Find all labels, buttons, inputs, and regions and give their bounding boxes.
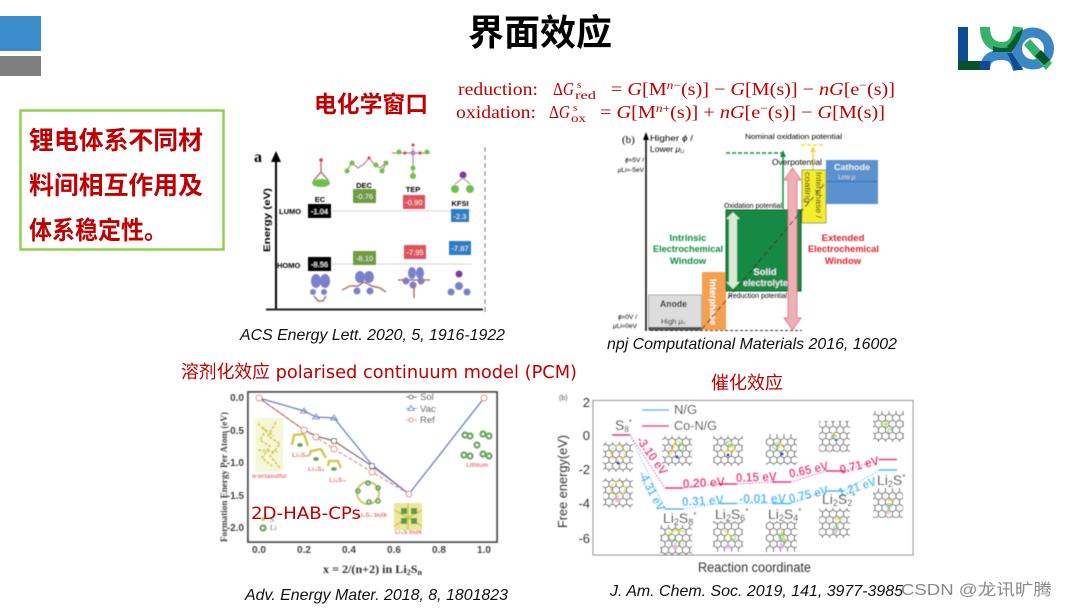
chart b: electrochemical window diagram: Extended: [822, 233, 865, 244]
watermark: CSDN @龙讯旷腾: [901, 581, 1052, 599]
interphase coating block: [802, 170, 826, 223]
chart d: free energy profile: Li: [877, 472, 888, 488]
chart b: electrochemical window diagram: Li: [680, 149, 684, 155]
chart b: electrochemical window diagram: (b): [622, 134, 635, 146]
chart b: electrochemical window diagram: μLi=0eV: [612, 323, 638, 330]
chart c: formation energy: Formation Energy Per Atom (eV): [219, 412, 229, 542]
chart a: LUMO and HOMO energy levels: -1.04: [311, 207, 328, 216]
chart a: LUMO and HOMO energy levels: -8.56: [311, 260, 328, 269]
structure insets: Li: [270, 523, 277, 532]
chart b: electrochemical window diagram: [612, 132, 879, 331]
chart b: electrochemical window diagram: Window: [825, 256, 862, 267]
chart d: free energy profile: 4: [793, 513, 798, 523]
chart c: formation energy: 0.0: [252, 545, 266, 556]
equations: reduction and oxidation: (s)]: [867, 79, 895, 100]
chart c: formation energy: [219, 392, 497, 577]
chart d: free energy profile: Li: [822, 491, 833, 507]
chart d: free energy profile: Co-N/G: [674, 418, 717, 433]
equations: reduction and oxidation: ΔG: [553, 79, 574, 99]
chart c: formation energy: -2.0: [227, 523, 244, 534]
chart d: free energy profile: -4: [578, 496, 590, 511]
chart d: free energy profile: 0.65 eV: [788, 459, 830, 481]
chart d: free energy profile: S: [679, 510, 688, 526]
chart d: free energy profile: 0.31 eV: [681, 493, 725, 509]
chart b: electrochemical window diagram: Reduction potential: [728, 293, 787, 300]
chart a: LUMO and HOMO energy levels: a: [254, 149, 262, 166]
window labels: Intrinsic: [670, 233, 706, 244]
annotation: 2D-HAB-CPs: 2D-HAB-CPs: [251, 504, 361, 524]
legend: [406, 392, 436, 426]
chart c: formation energy: 0.6: [387, 545, 401, 556]
icon: HOMO orbitals and molecules: [310, 267, 470, 301]
chart d: free energy profile: 0: [583, 428, 590, 443]
chart c: formation energy: 0.2: [297, 545, 311, 556]
chart a: LUMO and HOMO energy levels: -0.90: [405, 198, 423, 207]
chart d: free energy profile: S: [893, 472, 902, 488]
citation: Adv. Energy Mater.: Adv. Energy Mater. 2018, 8, 1801823: [244, 587, 508, 604]
equations: reduction and oxidation: s: [573, 102, 577, 114]
solid electrolyte block: [726, 210, 801, 291]
citation: J. Am. Chem. Soc.: J. Am. Chem. Soc. 2019, 141, 3977-3985: [609, 583, 903, 600]
equations: reduction and oxidation: = G[M: [611, 79, 664, 99]
chart a: LUMO and HOMO energy levels: HOMO: [277, 261, 300, 270]
chart a: LUMO and HOMO energy levels: TEP: [406, 185, 420, 194]
chart b: electrochemical window diagram: Nominal oxidation potential: [745, 132, 842, 141]
chart d: free energy profile: *: [745, 507, 748, 516]
legend: [642, 409, 669, 411]
chart d: free energy profile: 2: [779, 513, 784, 523]
chart c: formation energy: 1.0: [477, 545, 491, 556]
chart d: free energy profile: 2: [583, 395, 590, 410]
anode block: [648, 295, 702, 330]
chart d: free energy profile: *: [902, 473, 905, 482]
chart c: formation energy: 0.8: [432, 545, 446, 556]
chart b: electrochemical window diagram: Anode: [660, 299, 687, 309]
heading: electrochemical window: 电化学窗口: [314, 91, 428, 117]
chart d: free energy profile: -4.31 eV: [635, 469, 668, 514]
chart a: LUMO and HOMO energy levels: EC: [315, 195, 326, 204]
interphase orange block: [702, 272, 726, 330]
chart b: electrochemical window diagram: Oxidation potential: [724, 203, 782, 210]
heading: catalytic effect: 催化效应: [711, 373, 783, 393]
legend: Vac: [420, 404, 436, 415]
chart a: LUMO and HOMO energy levels: -2.3: [454, 212, 466, 221]
chart a: LUMO and HOMO energy levels: Energy (eV): [262, 188, 272, 252]
chart b: electrochemical window diagram: Electrochemical: [808, 244, 879, 255]
chart b: electrochemical window diagram: Electrochemical: [653, 244, 723, 255]
chart b: electrochemical window diagram: μLi=-5eV: [617, 167, 645, 174]
chart d: free energy profile: *: [798, 507, 801, 516]
chart c: formation energy: -0.5: [227, 426, 244, 437]
chart c: formation energy: -1.0: [227, 458, 244, 469]
decorative corner blocks: [0, 16, 41, 76]
chart a: LUMO and HOMO energy levels: LUMO: [279, 207, 301, 216]
structure insets: α-octasulfur: [252, 473, 287, 480]
structure insets: Li₂S₄: [329, 477, 346, 484]
chart d: free energy profile: S: [838, 491, 847, 507]
chart a: LUMO and HOMO energy levels: KFSI: [451, 199, 469, 208]
chart d: free energy profile: 0.71 eV: [838, 454, 881, 477]
chart d: free energy profile: -2: [578, 462, 590, 477]
callout: summary: 体系稳定性。: [29, 217, 167, 245]
chart b: electrochemical window diagram: Window: [670, 256, 707, 267]
chart d: free energy profile: 2: [847, 498, 852, 508]
chart c: formation energy: x = 2/(n+2) in Li: [323, 562, 406, 576]
chart a: LUMO and HOMO energy levels: -7.95: [406, 248, 424, 257]
chart b: electrochemical window diagram: High μLi: [661, 317, 686, 326]
equations: reduction and oxidation: nG[e: [720, 102, 759, 122]
cathode block: [826, 160, 878, 204]
chart d: free energy profile: Li: [768, 506, 779, 522]
callout: summary: 料间相互作用及: [29, 172, 203, 200]
equations: reduction and oxidation: −: [859, 78, 867, 92]
chart b: electrochemical window diagram: ϕ=5V /: [625, 157, 644, 164]
equations: reduction and oxidation: n+: [656, 101, 669, 115]
citation: ACS Energy Lett.: ACS Energy Lett. 2020, 5, 1916-1922: [239, 327, 505, 344]
chart d: free energy profile: *: [629, 418, 632, 427]
chart d: free energy profile: 2: [833, 498, 838, 508]
heading: solvation effect: 溶剂化效应 polarised continuum model (PCM): [181, 362, 577, 383]
chart a: LUMO and HOMO energy levels: [254, 144, 485, 315]
equations: reduction and oxidation: oxidation:: [456, 102, 536, 122]
structure insets: Li₂S₂ bulk: [357, 512, 387, 519]
chart d: free energy profile: Free energy(eV): [555, 435, 570, 528]
chart d: free energy profile: 2: [726, 513, 731, 523]
chart d: free energy profile: (b): [559, 395, 568, 402]
structure insets: [252, 418, 492, 536]
structure insets: Li₂S₈: [292, 452, 309, 459]
structure insets: Li₂S bulk: [395, 529, 422, 536]
chart d: free energy profile: *: [852, 492, 855, 501]
equations: reduction and oxidation: (s)] −: [768, 102, 818, 123]
chart b: electrochemical window diagram: Solid: [753, 267, 777, 278]
chart b: electrochemical window diagram: Lower μ: [650, 144, 680, 154]
graphene structure insets: [603, 411, 904, 555]
chart b: electrochemical window diagram: ϕ=0V /: [618, 314, 637, 321]
N/G levels: [665, 470, 897, 509]
chart d: free energy profile: Li: [663, 510, 674, 526]
structure insets: Li₂S₆: [308, 466, 325, 473]
equations: reduction and oxidation: (s)] −: [681, 79, 730, 100]
equations: reduction and oxidation: G[M(s)] − nG[e: [730, 79, 858, 99]
chart c: formation energy: 2: [407, 568, 411, 577]
citation: npj Computational Materials: npj Computational Materials 2016, 16002: [607, 336, 897, 353]
chart b: electrochemical window diagram: Overpotential: [772, 157, 822, 167]
equations: reduction and oxidation: (s)] +: [670, 102, 720, 123]
chart d: free energy profile: Reaction coordinate: [698, 560, 811, 575]
chart d: free energy profile: 8: [624, 425, 629, 434]
chart d: free energy profile: *: [693, 511, 696, 520]
equations: reduction and oxidation: −: [760, 101, 768, 115]
equations: reduction and oxidation: ΔG: [549, 102, 570, 122]
Co-N/G levels: [612, 435, 897, 488]
equations: reduction and oxidation: ox: [571, 111, 586, 125]
chart d: free energy profile: Li: [715, 506, 726, 522]
equations: reduction and oxidation: reduction:: [458, 79, 538, 99]
chart d: free energy profile: 8: [688, 517, 693, 527]
chart d: free energy profile: 0.15 eV: [736, 470, 778, 485]
chart d: free energy profile: S: [615, 417, 624, 433]
chart d: free energy profile: -0.01 eV: [739, 492, 787, 506]
chart d: free energy profile: 1.21 eV: [837, 474, 879, 500]
structure insets: S: [270, 515, 274, 524]
equations: reduction and oxidation: = G[M: [600, 102, 653, 122]
structure insets: Lithium: [466, 462, 488, 469]
equations: reduction and oxidation: red: [575, 88, 596, 102]
equations: reduction and oxidation: s: [577, 79, 581, 91]
chart c: formation energy: n: [418, 568, 423, 577]
chart c: formation energy: 0.4: [342, 545, 356, 556]
chart d: free energy profile: 0.20 eV: [682, 475, 726, 491]
chart d: free energy profile: -3.10 eV: [634, 434, 671, 478]
chart c: formation energy: S: [411, 562, 418, 576]
chart d: free energy profile: 0.75 eV: [788, 483, 830, 506]
chart a: LUMO and HOMO energy levels: -7.87: [451, 244, 469, 253]
chart a: LUMO and HOMO energy levels: -8.10: [356, 254, 373, 263]
chart a: LUMO and HOMO energy levels: -0.76: [356, 192, 373, 201]
legend: Ref: [420, 415, 435, 426]
chart d: free energy profile: N/G: [674, 402, 697, 417]
chart d: free energy profile: 2: [674, 517, 679, 527]
chart b: electrochemical window diagram: Low μ: [838, 174, 856, 181]
equations: reduction and oxidation: G[M(s)]: [818, 102, 879, 122]
chart b: electrochemical window diagram: Cathode: [834, 162, 870, 172]
chart d: free energy profile: 6: [740, 513, 745, 523]
chart d: free energy profile: 2: [888, 479, 893, 489]
legend: Sol: [420, 392, 434, 403]
chart b: electrochemical window diagram: Interphase: [708, 279, 718, 325]
chart b: electrochemical window diagram: Higher ϕ /: [650, 133, 694, 143]
chart d: free energy profile: -6: [578, 531, 590, 546]
icon: LXQ logo: [958, 27, 1052, 70]
chart d: free energy profile: S: [731, 506, 740, 522]
chart b: electrochemical window diagram: Interphase /: [814, 172, 824, 219]
chart d: free energy profile: S: [784, 506, 793, 522]
adsorbed sulfur and metal atoms: [611, 422, 895, 550]
chart c: formation energy: 0.0: [230, 393, 244, 404]
callout: summary: 锂电体系不同材: [29, 127, 203, 155]
callout: summary: [20, 110, 224, 250]
equations: reduction and oxidation: n−: [667, 78, 680, 92]
icon: LUMO orbitals and molecules: [312, 144, 474, 193]
chart d: free energy profile: [555, 395, 913, 575]
title: 界面效应: [468, 12, 612, 53]
chart c: formation energy: -1.5: [227, 491, 244, 502]
chart b: electrochemical window diagram: electrolyte: [743, 278, 788, 289]
double arrow: extended window: [784, 168, 801, 330]
chart b: electrochemical window diagram: coating: [803, 172, 813, 203]
equations: reduction and oxidation: [456, 78, 895, 125]
chart a: LUMO and HOMO energy levels: DEC: [356, 181, 372, 190]
